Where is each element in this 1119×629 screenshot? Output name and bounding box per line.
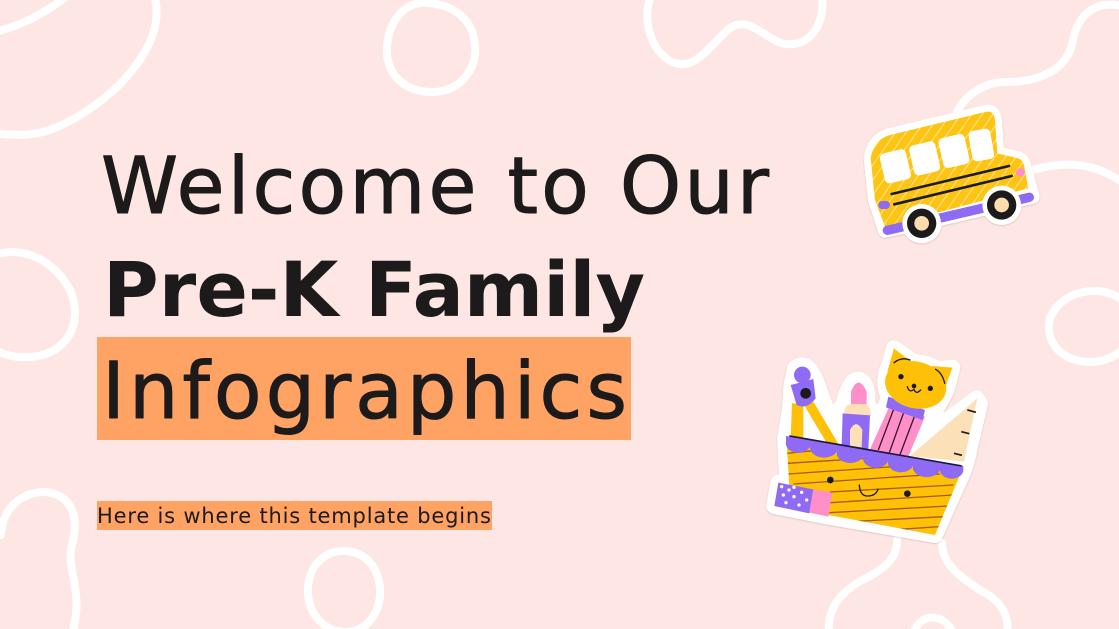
subtitle: Here is where this template begins <box>97 504 491 528</box>
basket face <box>827 477 911 497</box>
washi tape <box>774 483 832 517</box>
cat head <box>880 348 952 415</box>
bus headlight <box>1016 168 1025 177</box>
basket rim line <box>789 436 962 466</box>
bus wheels <box>902 186 1021 243</box>
compass <box>791 367 839 445</box>
lipstick marker <box>842 382 871 449</box>
title line: Pre-K Family: Pre-K Family <box>103 245 645 334</box>
bus trim <box>882 197 1029 230</box>
bus sticker outline <box>871 112 1033 243</box>
ruler <box>910 398 977 462</box>
icon: basket of school supplies sticker <box>774 348 980 535</box>
icon: school bus sticker <box>871 112 1033 243</box>
title highlight: Infographics: Infographics <box>102 347 627 437</box>
bus body <box>871 112 1028 227</box>
basket weave lines <box>787 451 953 529</box>
title line: Welcome to Our: Welcome to Our <box>101 142 770 232</box>
bus stripes <box>892 166 1012 204</box>
pencil <box>870 397 925 457</box>
basket scalloped rim <box>786 436 963 479</box>
basket sticker outline <box>774 348 980 535</box>
basket body <box>787 442 962 535</box>
bus windows <box>879 128 995 184</box>
